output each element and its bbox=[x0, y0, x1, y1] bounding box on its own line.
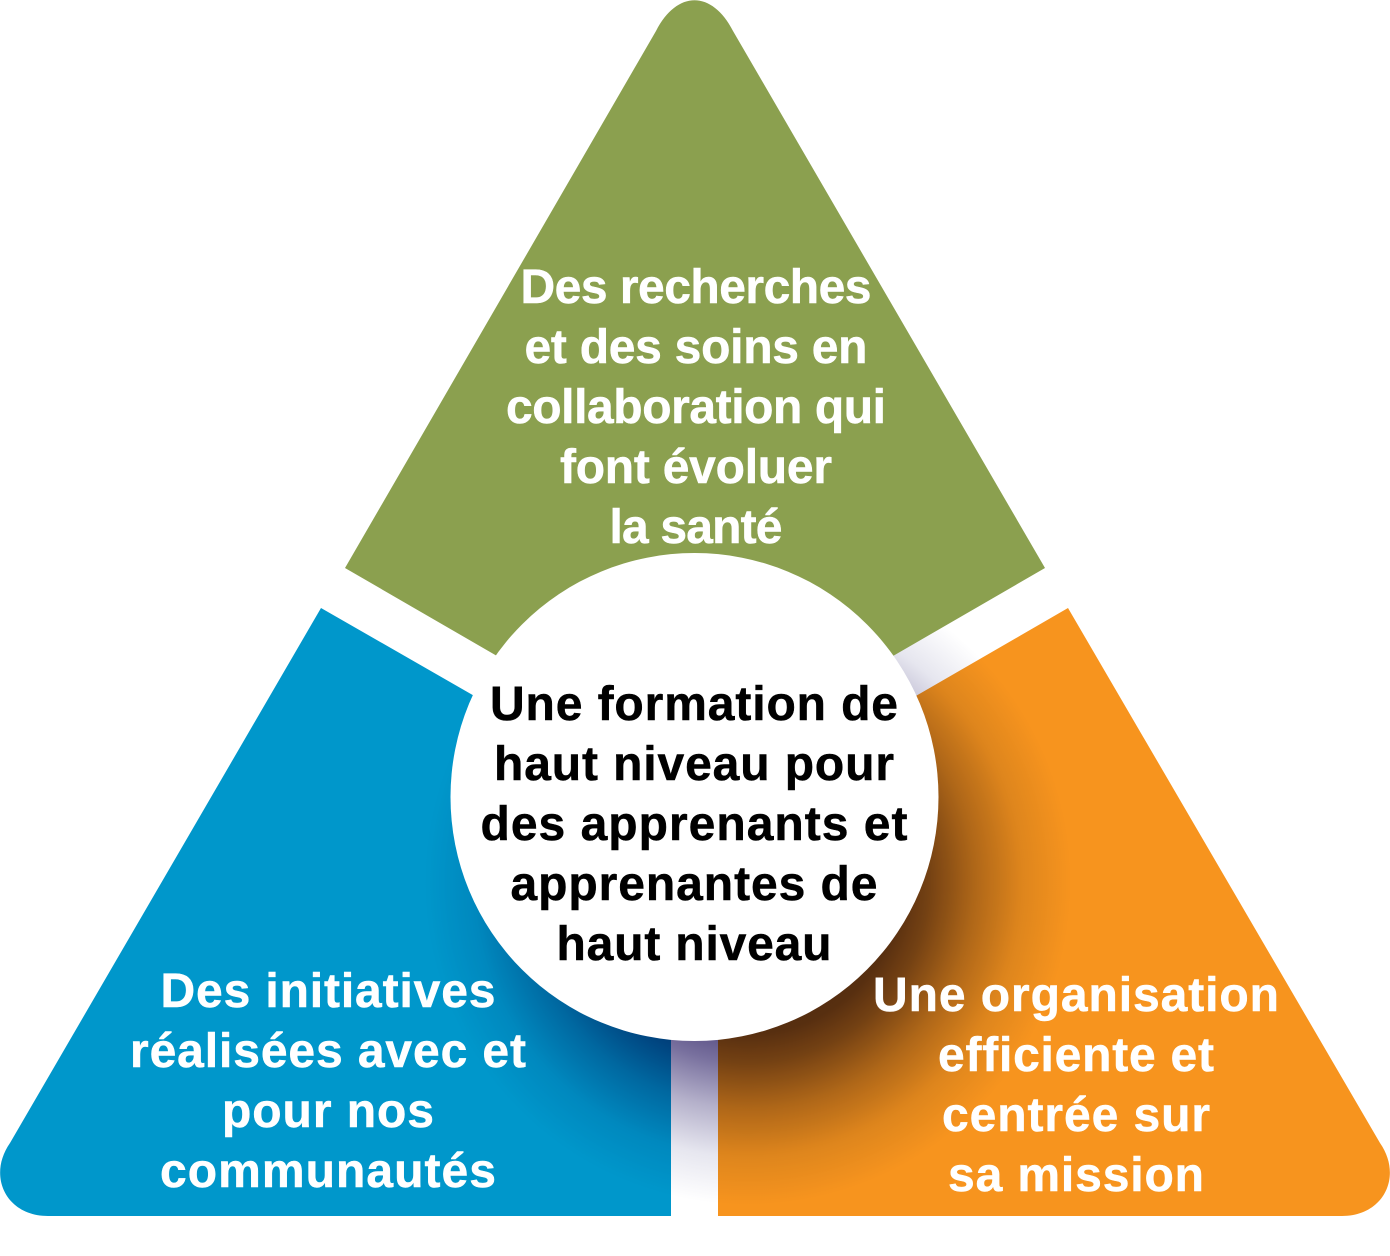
panel: orange triangle bbox=[718, 608, 1390, 1216]
text: orange triangle label: sa mission bbox=[948, 1149, 1204, 1202]
text: green triangle label bbox=[506, 261, 886, 554]
circle shadow bbox=[425, 559, 1071, 1205]
text: centre circle label: Une formation de bbox=[490, 678, 898, 731]
text: blue triangle label: réalisées avec et bbox=[130, 1025, 526, 1078]
centre circle bbox=[450, 553, 938, 1041]
text: centre circle label: apprenantes de bbox=[510, 858, 878, 911]
text: centre circle label bbox=[480, 678, 908, 971]
text: blue triangle label: pour nos bbox=[222, 1085, 434, 1138]
text: centre circle label: des apprenants et bbox=[480, 798, 908, 851]
text: centre circle label: haut niveau bbox=[556, 918, 832, 971]
text: green triangle label: la santé bbox=[610, 501, 782, 554]
text: blue triangle label: communautés bbox=[160, 1145, 496, 1198]
panel: green triangle bbox=[345, 0, 1045, 700]
text: orange triangle label: Une organisation bbox=[873, 969, 1279, 1022]
text: green triangle label: Des recherches bbox=[520, 261, 872, 314]
text: orange triangle label bbox=[873, 969, 1279, 1202]
text: orange triangle label: centrée sur bbox=[942, 1089, 1210, 1142]
text: green triangle label: collaboration qui bbox=[506, 381, 886, 434]
panel: blue triangle bbox=[0, 608, 671, 1216]
text: centre circle label: haut niveau pour bbox=[494, 738, 894, 791]
text: blue triangle label bbox=[130, 965, 526, 1198]
text: green triangle label: font évoluer bbox=[560, 441, 832, 494]
text: orange triangle label: efficiente et bbox=[938, 1029, 1214, 1082]
text: green triangle label: et des soins en bbox=[524, 321, 868, 374]
text: blue triangle label: Des initiatives bbox=[160, 965, 496, 1018]
